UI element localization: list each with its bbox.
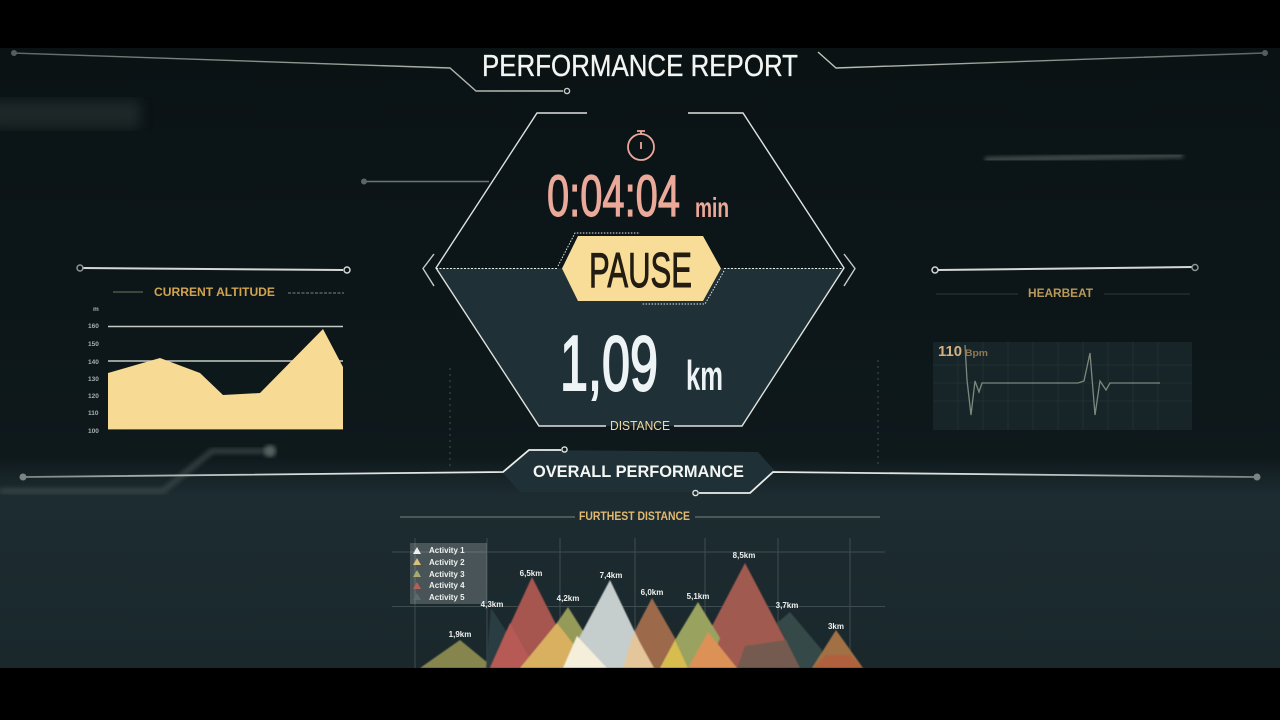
legend: Activity 3 bbox=[429, 570, 465, 579]
heartbeat chart bbox=[933, 342, 1192, 430]
area chart bbox=[108, 326, 343, 430]
triangle value labels: 4,3km bbox=[481, 600, 503, 609]
title: PERFORMANCE REPORT bbox=[482, 48, 798, 83]
distance unit: km bbox=[686, 352, 723, 399]
altitude axis labels: 120 bbox=[88, 393, 99, 400]
panel heading: CURRENT ALTITUDE bbox=[154, 285, 275, 299]
distance label: DISTANCE bbox=[610, 418, 670, 433]
pause badge bbox=[558, 233, 724, 304]
timer value: 0:04:04 bbox=[547, 164, 680, 229]
legend: Activity 5 bbox=[429, 593, 465, 602]
blurred background streaks bbox=[0, 100, 1183, 491]
triangle value labels bbox=[449, 551, 844, 639]
hexagon lower fill bbox=[436, 268, 844, 426]
triangle value labels: 3km bbox=[828, 622, 844, 631]
triangle value labels: 7,4km bbox=[600, 571, 622, 580]
pause badge: PAUSE bbox=[589, 244, 692, 298]
altitude axis labels: 100 bbox=[88, 428, 99, 435]
altitude axis labels: 160 bbox=[88, 323, 99, 330]
triangle value labels: 3,7km bbox=[776, 601, 798, 610]
legend: Activity 2 bbox=[429, 558, 465, 567]
triangle value labels: 8,5km bbox=[733, 551, 755, 560]
title connector: left bbox=[11, 50, 570, 94]
timer unit: min bbox=[695, 192, 729, 223]
triangle value labels: 4,2km bbox=[557, 594, 579, 603]
altitude axis labels: m bbox=[93, 306, 99, 313]
heart rate unit: Bpm bbox=[965, 348, 988, 358]
header connector: left bbox=[20, 447, 567, 480]
altitude axis labels: 140 bbox=[88, 359, 99, 366]
heart rate value: 110 bbox=[938, 343, 962, 360]
chart grid bbox=[392, 538, 885, 668]
triangle value labels: 6,0km bbox=[641, 588, 663, 597]
header text: OVERALL PERFORMANCE bbox=[533, 462, 744, 481]
panel top bar bbox=[932, 264, 1198, 273]
hexagon outline bbox=[436, 113, 844, 426]
triangle value labels: 1,9km bbox=[449, 630, 471, 639]
chevrons bbox=[423, 254, 855, 286]
header plate bbox=[503, 450, 776, 492]
panel heading: HEARBEAT bbox=[1028, 286, 1094, 300]
dotted divider bbox=[436, 268, 844, 270]
icon: stopwatch bbox=[628, 131, 654, 160]
altitude axis labels: 130 bbox=[88, 376, 99, 383]
triangles bbox=[420, 563, 863, 668]
triangle value labels: 5,1km bbox=[687, 592, 709, 601]
altitude axis labels: 150 bbox=[88, 341, 99, 348]
altitude axis labels: 110 bbox=[88, 410, 99, 417]
distance value: 1,09 bbox=[560, 319, 658, 407]
panel: overall performance header bbox=[20, 447, 1260, 496]
chart heading: FURTHEST DISTANCE bbox=[579, 511, 690, 523]
triangle value labels: 6,5km bbox=[520, 569, 542, 578]
title connector: right bbox=[818, 50, 1268, 68]
legend: Activity 4 bbox=[429, 581, 465, 590]
legend bbox=[410, 543, 487, 604]
panel: current altitude bbox=[77, 265, 350, 435]
connector to hexagon bbox=[361, 178, 489, 184]
header connector: right bbox=[693, 472, 1260, 496]
panel: furthest distance chart bbox=[392, 511, 885, 668]
altitude axis labels bbox=[88, 306, 99, 435]
legend: Activity 1 bbox=[429, 546, 465, 555]
panel: central hexagon bbox=[423, 113, 855, 433]
panel: heartbeat bbox=[932, 264, 1198, 430]
panel top bar bbox=[77, 265, 350, 273]
